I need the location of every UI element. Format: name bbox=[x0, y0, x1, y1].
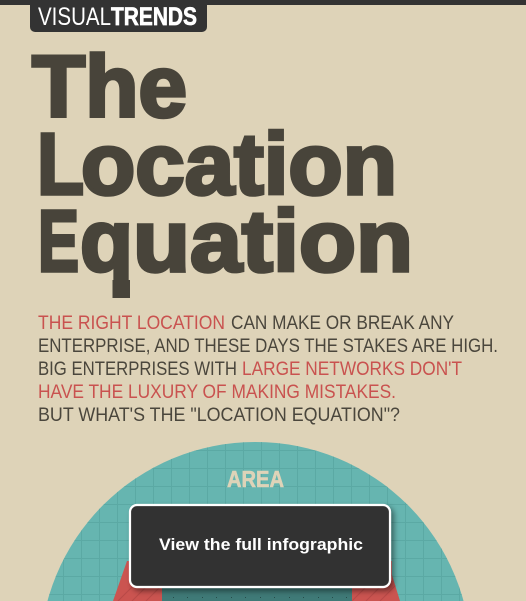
area circle diagram bbox=[48, 442, 464, 601]
building roof bbox=[113, 561, 400, 601]
intro text: THE RIGHT LOCATION bbox=[38, 313, 225, 334]
button: view the full infographic bbox=[130, 505, 390, 587]
button: view the full infographic: View the full infographic bbox=[159, 535, 363, 554]
intro text: BIG ENTERPRISES WITH bbox=[38, 359, 237, 380]
logo: Visual Trends: TRENDS bbox=[111, 3, 197, 31]
area label: AREA bbox=[227, 466, 284, 492]
intro text: LARGE NETWORKS DON'T bbox=[242, 359, 462, 380]
title: q bbox=[80, 193, 133, 290]
intro text: BUT WHAT'S THE "LOCATION EQUATION"? bbox=[38, 405, 400, 426]
intro text: HAVE THE LUXURY OF MAKING MISTAKES. bbox=[38, 382, 396, 403]
title bbox=[32, 38, 413, 298]
title: The bbox=[32, 38, 187, 136]
intro text bbox=[38, 313, 498, 426]
intro text: CAN MAKE OR BREAK ANY bbox=[231, 313, 454, 334]
title: L bbox=[37, 116, 84, 213]
building base bbox=[162, 588, 352, 601]
logo: Visual Trends bbox=[30, 0, 207, 32]
title: E bbox=[38, 193, 79, 290]
title: uation bbox=[133, 193, 413, 290]
title: ocation bbox=[81, 116, 397, 213]
logo: Visual Trends: VISUAL bbox=[38, 3, 111, 31]
top bar bbox=[0, 0, 526, 5]
